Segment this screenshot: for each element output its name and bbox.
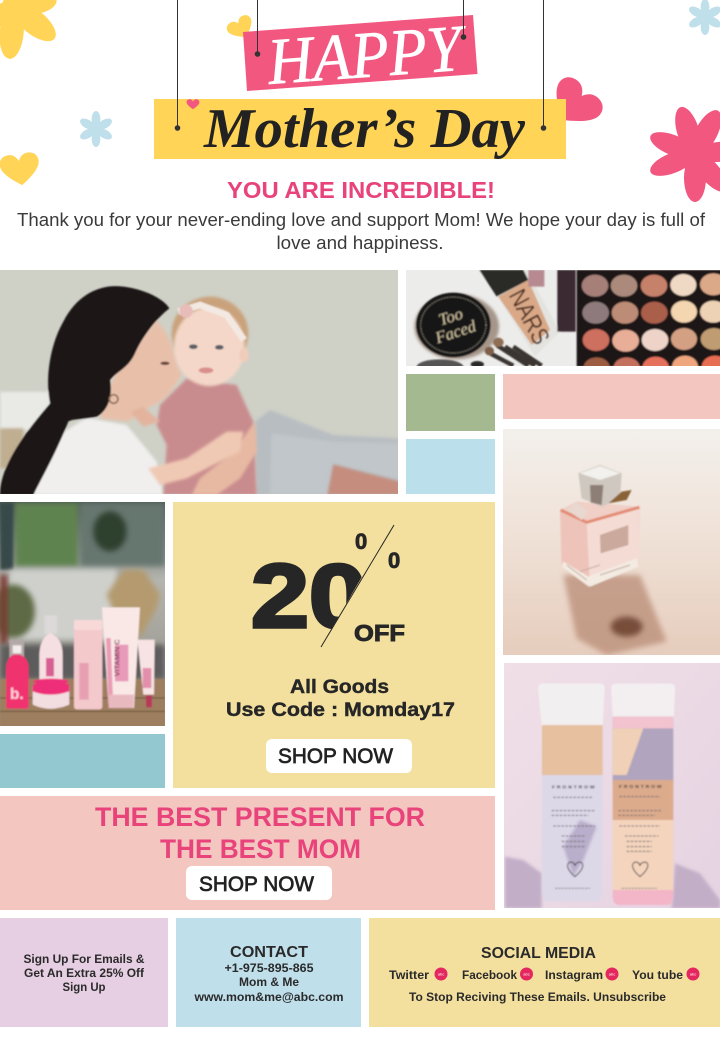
decoration: blue flower top right <box>687 0 720 35</box>
discount: 20 percent off graphic <box>251 525 405 647</box>
social icons <box>434 968 700 980</box>
text block: thank you message: love and happiness. <box>276 233 444 253</box>
footer panel: sign up <box>0 918 168 1027</box>
photo: skincare products <box>0 502 165 727</box>
photo: makeup flatlay: Faced <box>432 316 479 348</box>
photo: makeup flatlay: NARS <box>503 285 554 349</box>
footer panel: contact: Mom & Me <box>239 975 299 989</box>
social icons: abc <box>690 972 696 976</box>
button: shop now <box>266 739 412 773</box>
colour block: teal <box>0 734 165 788</box>
photo: skincare products: VITAMIN C <box>112 639 121 676</box>
photo: shampoo bottles <box>504 663 720 908</box>
photo: perfume bottle <box>503 429 720 655</box>
social links <box>389 968 683 982</box>
footer panel: social media <box>369 918 720 1027</box>
footer panel: sign up: Get An Extra 25% Off <box>24 966 145 980</box>
photo: mother kissing baby <box>0 270 400 495</box>
discount: 20 percent off graphic: 0 <box>388 548 400 573</box>
social links: Instagram <box>545 968 603 982</box>
discount: 20 percent off graphic: OFF <box>354 620 405 646</box>
button: shop now <box>186 866 332 900</box>
footer panel: sign up: Sign Up <box>62 980 106 994</box>
colour block: pink <box>503 374 720 419</box>
text block: thank you message <box>17 210 706 253</box>
photo: skincare products: b. <box>10 686 24 703</box>
decoration: yellow flower top left <box>0 0 62 60</box>
panel: best present banner <box>0 796 495 910</box>
heading: social media: SOCIAL MEDIA <box>481 945 596 962</box>
icon: small pink heart <box>187 99 199 109</box>
photo: shampoo bottles: FRONTROW <box>619 784 662 790</box>
button: shop now: SHOP NOW <box>278 745 393 768</box>
social links: Facebook <box>462 968 517 982</box>
footer panel: contact: CONTACT <box>230 944 308 961</box>
hanging strings <box>175 0 546 130</box>
banner: HAPPY: HAPPY <box>264 12 470 99</box>
heading: best present: THE BEST MOM <box>160 834 361 864</box>
colour block: light blue <box>406 439 495 494</box>
decoration: pink flower right <box>647 104 720 202</box>
social icons: abc <box>609 972 615 976</box>
social links: Twitter <box>389 968 429 982</box>
text: promo code: Use Code : Momday17 <box>226 700 455 721</box>
social icons: abc <box>438 972 444 976</box>
decoration: pink heart right <box>542 72 607 137</box>
decoration: yellow heart top <box>225 13 258 44</box>
decoration: yellow heart left <box>0 151 42 188</box>
footer panel: contact: www.mom&me@abc.com <box>193 990 344 1004</box>
footer panel: contact <box>176 918 361 1027</box>
footer panel: sign up: Sign Up For Emails & <box>24 952 145 966</box>
heading: best present: THE BEST PRESENT FOR <box>95 802 425 832</box>
heading: best present <box>95 802 425 864</box>
social links: You tube <box>632 968 683 982</box>
footer panel: contact: +1-975-895-865 <box>224 961 314 975</box>
social icons: abc <box>523 972 530 976</box>
photo: makeup flatlay: Too <box>436 304 465 329</box>
banner: Mother's Day: Mother’s Day <box>203 98 526 160</box>
discount: 20 percent off graphic: 0 <box>355 529 367 554</box>
button: shop now: SHOP NOW <box>199 873 314 896</box>
colour block: green <box>406 374 495 431</box>
panel: discount offer <box>173 502 495 788</box>
text: promo code <box>226 677 455 721</box>
decoration: blue flower left <box>78 111 114 147</box>
discount: 20 percent off graphic: 20 <box>251 547 367 647</box>
photo: makeup flatlay <box>406 270 720 366</box>
text: unsubscribe: To Stop Reciving These Emails. Unsubscribe <box>409 990 666 1004</box>
text block: thank you message: Thank you for your never-ending love and support Mom! We hope your day is full of <box>17 210 706 230</box>
photo: shampoo bottles: FRONTROW <box>552 785 595 791</box>
heading: you are incredible: YOU ARE INCREDIBLE! <box>227 177 495 203</box>
text: promo code: All Goods <box>290 677 389 698</box>
